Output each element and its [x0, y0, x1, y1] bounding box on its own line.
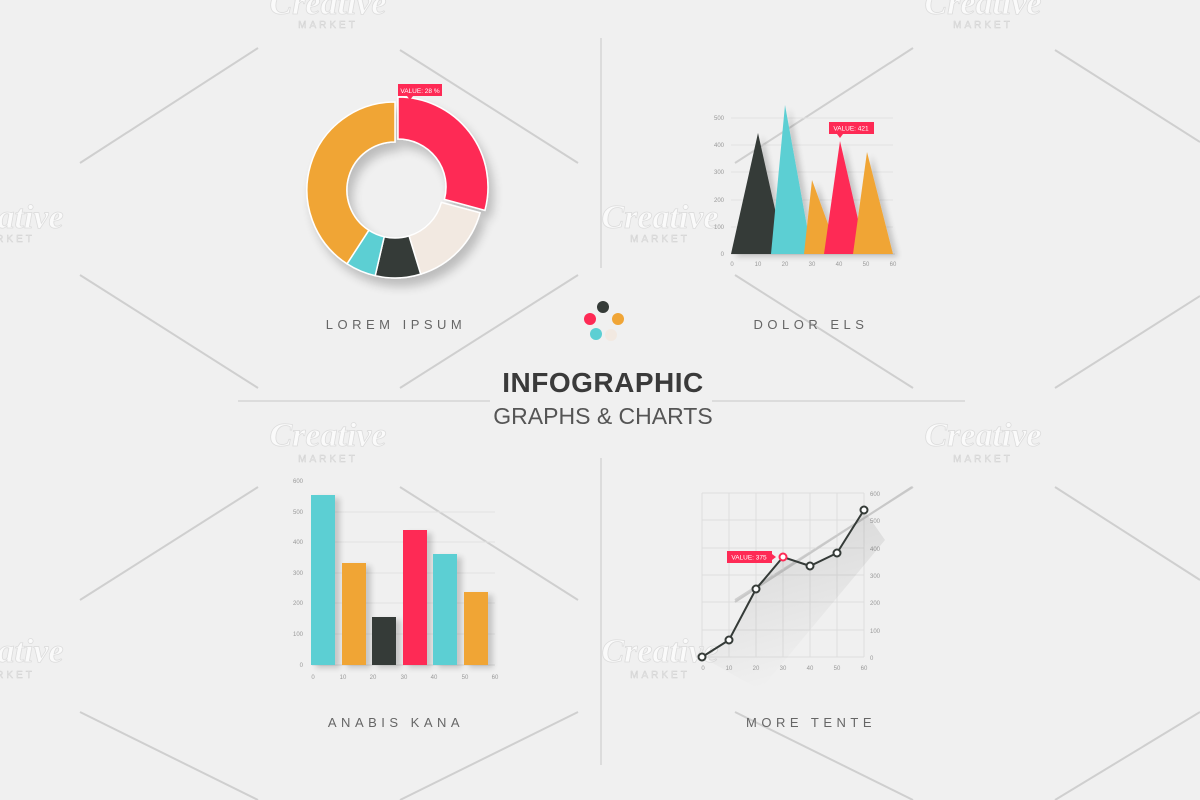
panel: bar chart: [293, 479, 499, 730]
panel: line chart: [698, 487, 912, 730]
text: Creative: [601, 199, 719, 236]
title: INFOGRAPHIC: [502, 367, 704, 398]
panel: triangle chart: 300: [714, 170, 725, 176]
panel: bar chart: 600: [293, 479, 304, 485]
text: Creative: [924, 417, 1042, 454]
panel: line chart: 300: [870, 574, 881, 580]
text: MARKET: [953, 20, 1013, 31]
panel: triangle chart: 0: [730, 262, 734, 268]
line series: [698, 506, 868, 660]
callout: value 28: [398, 84, 442, 100]
panel: line chart: 200: [870, 601, 881, 607]
icon: dots: [584, 301, 624, 341]
panel: line chart: 40: [807, 666, 814, 672]
panel: bar chart: 60: [492, 675, 499, 681]
panel: triangle chart: 0: [721, 252, 725, 258]
title: [493, 367, 713, 429]
callout: value 375: VALUE: 375: [731, 554, 767, 562]
panel: bar chart: 200: [293, 601, 304, 607]
callout: value 421: VALUE: 421: [833, 126, 869, 132]
panel: bar chart: 0: [311, 675, 315, 681]
panel: line chart: 20: [753, 666, 760, 672]
panel: bar chart: 500: [293, 510, 304, 516]
text: Creative: [601, 633, 719, 670]
text: MARKET: [298, 20, 358, 31]
panel: triangle chart: 200: [714, 198, 725, 204]
panel: bar chart: 40: [431, 675, 438, 681]
text: Creative: [269, 417, 387, 454]
panel: bar chart: 30: [401, 675, 408, 681]
donut chart: [307, 97, 488, 278]
text: MARKET: [630, 234, 690, 245]
triangles: [731, 105, 893, 254]
label: dolor els: DOLOR ELS: [754, 317, 868, 332]
callout: value 375: [727, 551, 776, 563]
label: more tente: MORE TENTE: [746, 715, 876, 730]
panel: triangle chart: 50: [863, 262, 870, 268]
panel: triangle chart: 30: [809, 262, 816, 268]
panel: line chart: 0: [701, 666, 705, 672]
panel: line chart: 500: [870, 519, 881, 525]
panel: triangle chart: 40: [836, 262, 843, 268]
panel: triangle chart: 400: [714, 143, 725, 149]
panel: triangle chart: 10: [755, 262, 762, 268]
label: anabis kana: ANABIS KANA: [328, 715, 464, 730]
callout: value 421: [829, 122, 874, 138]
panel: bar chart: 20: [370, 675, 377, 681]
panel: bar chart: 300: [293, 571, 304, 577]
panel: bar chart: 100: [293, 632, 304, 638]
panel: triangle chart: 100: [714, 225, 725, 231]
panel: line chart: 400: [870, 547, 881, 553]
panel: triangle chart: 60: [890, 262, 897, 268]
panel: bar chart: 0: [300, 663, 304, 669]
panel: bar chart: 50: [462, 675, 469, 681]
panel: triangle chart: 500: [714, 116, 725, 122]
title: GRAPHS & CHARTS: [493, 403, 713, 429]
text: MARKET: [953, 454, 1013, 465]
panel: line chart: 60: [861, 666, 868, 672]
panel: donut chart: [307, 84, 488, 332]
panel: line chart: 0: [870, 656, 874, 662]
panel: triangle chart: 20: [782, 262, 789, 268]
text: MARKET: [630, 670, 690, 681]
panel: line chart: 100: [870, 629, 881, 635]
panel: line chart: 10: [726, 666, 733, 672]
panel: line chart: 30: [780, 666, 787, 672]
panel: triangle chart: [714, 105, 897, 332]
panel: bar chart: 10: [340, 675, 347, 681]
text: MARKET: [298, 454, 358, 465]
bars: [311, 495, 488, 665]
callout: value 28: VALUE: 28 %: [400, 88, 440, 95]
label: lorem ipsum: LOREM IPSUM: [326, 317, 466, 332]
panel: line chart: 600: [870, 492, 881, 498]
panel: line chart: 50: [834, 666, 841, 672]
panel: bar chart: 400: [293, 540, 304, 546]
